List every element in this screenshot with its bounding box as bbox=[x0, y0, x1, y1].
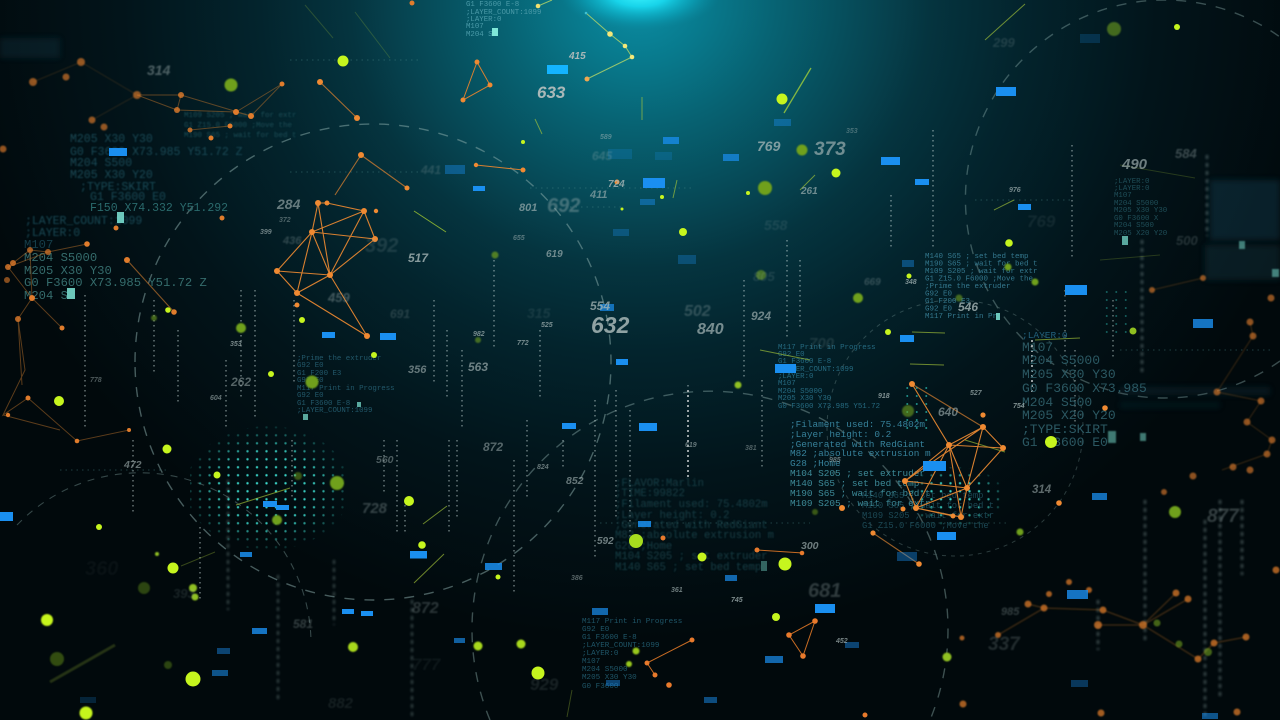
code: center left small bbox=[297, 355, 395, 415]
bottom right nodes bbox=[960, 566, 1280, 716]
code: upper right bbox=[1114, 178, 1167, 238]
code: upper left crisp line: F150 X74.332 Y51.292 bbox=[90, 202, 228, 215]
code: top left small: M190 S65 ; wait for bed t bbox=[184, 132, 297, 140]
bright numbers: 284 bbox=[276, 196, 301, 212]
code: lower center dim bbox=[615, 478, 774, 574]
bright numbers: 517 bbox=[408, 251, 429, 265]
code: center right small: G0 F3600 X73.985 Y51.72 bbox=[778, 403, 880, 411]
code: bottom center: G92 E0 bbox=[582, 626, 610, 634]
code: center left small: G92 E0 bbox=[297, 377, 324, 385]
tiny numbers: 824 bbox=[537, 464, 549, 471]
dim defocused numbers: 872 bbox=[412, 600, 439, 617]
bright numbers: 262 bbox=[230, 375, 251, 389]
code: upper right: M204 S5000 bbox=[1114, 200, 1158, 208]
mesh nodes bbox=[839, 381, 1108, 567]
code: left block bbox=[24, 238, 207, 303]
bright numbers: 300 bbox=[801, 540, 819, 552]
tiny numbers: 754 bbox=[1013, 403, 1025, 410]
bright numbers: 801 bbox=[519, 202, 537, 214]
code: behind network lower right: M109 S205 ; wait for extr bbox=[862, 511, 994, 521]
code: upper right: M204 S500 bbox=[1114, 222, 1154, 230]
code: mid-right small block: M190 S65 ; wait for bed t bbox=[925, 260, 1038, 268]
code: mid-right small block: G92 E0 bbox=[925, 290, 953, 298]
code: mid-right small block: M109 S205 ; wait for extr bbox=[925, 268, 1038, 276]
code: large right block: M204 S500 bbox=[1022, 395, 1092, 410]
tiny numbers: 353 bbox=[230, 341, 242, 348]
code: large right block: M205 X20 Y20 bbox=[1022, 408, 1116, 423]
mint data markers bbox=[67, 28, 1279, 571]
code: center right small: M117 Print in Progress bbox=[778, 344, 876, 352]
code: bottom center: G0 F3600 bbox=[582, 683, 619, 691]
network: bottom center bbox=[644, 536, 868, 718]
bright numbers: 546 bbox=[958, 300, 978, 314]
code: center right small: ;LAYER_COUNT:1099 bbox=[778, 366, 853, 374]
code: large right block: G1 F3600 E0 bbox=[1022, 435, 1108, 450]
tiny numbers: 361 bbox=[671, 587, 683, 594]
bright numbers: 633 bbox=[537, 83, 566, 102]
dim defocused numbers: 502 bbox=[684, 303, 711, 320]
bright numbers: 769 bbox=[757, 138, 781, 154]
code: top center bbox=[466, 1, 541, 39]
code: center right small bbox=[778, 344, 880, 411]
bright numbers: 490 bbox=[1121, 156, 1148, 173]
network lines top-left bbox=[33, 62, 282, 130]
tiny numbers: 525 bbox=[541, 322, 553, 329]
bright numbers: 724 bbox=[608, 179, 625, 190]
code: center right small: G92 E0 bbox=[778, 351, 805, 359]
code: upper right: G0 F3600 X bbox=[1114, 215, 1159, 223]
code: upper right: M205 X30 Y30 bbox=[1114, 207, 1167, 215]
tiny numbers: 772 bbox=[517, 340, 529, 347]
code: left block: M204 S bbox=[24, 289, 68, 303]
code: lower center dim: ;Filament used: 75.4802m bbox=[615, 499, 768, 511]
tiny numbers: 619 bbox=[685, 442, 697, 449]
code: upper right: ;LAYER:0 bbox=[1114, 185, 1149, 193]
bright numbers: 472 bbox=[123, 459, 142, 471]
code: left block: M107 bbox=[24, 238, 53, 252]
mesh lines bbox=[127, 82, 407, 336]
code: center right main: M109 S205 ; wait for extr bbox=[790, 498, 931, 509]
bright numbers: 560 bbox=[376, 454, 394, 466]
code: center right small: M204 S5000 bbox=[778, 388, 822, 396]
code: center right small: M107 bbox=[778, 380, 796, 388]
code: center right small: G1 F3600 E-8 bbox=[778, 358, 831, 366]
dim defocused numbers: 392 bbox=[365, 235, 398, 257]
dim defocused numbers: 315 bbox=[527, 305, 551, 321]
blurred data panel far right bbox=[0, 38, 1280, 408]
code: center left small: G1 F200 E3 bbox=[297, 370, 341, 378]
dim defocused numbers: 777 bbox=[412, 655, 442, 674]
dim defocused numbers: 441 bbox=[420, 163, 441, 177]
dim defocused numbers: 882 bbox=[328, 695, 354, 712]
tiny numbers: 348 bbox=[905, 279, 917, 286]
code: upper right: M205 X20 Y20 bbox=[1114, 230, 1167, 238]
dim defocused numbers: 500 bbox=[1176, 233, 1198, 248]
bright numbers: 640 bbox=[938, 405, 958, 419]
network: right center mesh bbox=[839, 381, 1108, 567]
code: large right block: M204 S5000 bbox=[1022, 353, 1100, 368]
code: center right main: G28 ;Home bbox=[790, 458, 841, 469]
code: left block: M205 X30 Y30 bbox=[24, 264, 112, 278]
dim defocused numbers: 360 bbox=[85, 558, 118, 580]
bright numbers: 840 bbox=[697, 321, 724, 338]
code: lower center dim: M140 S65 ; set bed temp bbox=[615, 562, 761, 574]
dim defocused numbers: 681 bbox=[808, 580, 841, 602]
code: top left small: G1 Z15.0 F6000 ;Move the bbox=[184, 122, 292, 130]
code: upper left defocused bbox=[25, 133, 243, 240]
code: upper left defocused: G1 F3600 E0 bbox=[90, 191, 166, 204]
dim defocused numbers: 728 bbox=[362, 500, 388, 517]
code: bottom center: ;LAYER:0 bbox=[582, 650, 619, 658]
code: center right main: M140 S65 ; set bed temp bbox=[790, 478, 919, 489]
code: mid-right small block: ;Prime the extruder bbox=[925, 283, 1011, 291]
code: center right main: ;Filament used: 75.4802m bbox=[790, 419, 925, 430]
defocused vertical streams bbox=[228, 155, 1242, 720]
code: mid-right small block: M117 Print in Pr bbox=[925, 313, 997, 321]
tiny numbers: 527 bbox=[970, 390, 983, 397]
code: large right block: ;TYPE:SKIRT bbox=[1022, 422, 1108, 437]
dim defocused numbers: 985 bbox=[1001, 606, 1020, 618]
bright numbers: 261 bbox=[800, 186, 818, 197]
tiny numbers: 381 bbox=[745, 445, 757, 452]
code: bottom center: M107 bbox=[582, 658, 600, 666]
network: right side defocused bbox=[1149, 275, 1276, 495]
code: large right block: G0 F3600 X73.985 bbox=[1022, 381, 1147, 396]
tiny numbers: 372 bbox=[279, 217, 291, 224]
bright numbers: 592 bbox=[597, 536, 614, 547]
right network lines bbox=[1152, 278, 1272, 470]
code: top center: M204 S bbox=[466, 31, 493, 39]
network: bottom right defocused bbox=[960, 566, 1280, 716]
code: upper left defocused: M205 X30 Y30 bbox=[70, 133, 153, 146]
dim defocused numbers: 393 bbox=[173, 586, 195, 601]
code: lower center dim: M82 ;absolute extrusion m bbox=[615, 530, 774, 542]
bright numbers: 356 bbox=[408, 364, 427, 376]
code: top left small: M109 S205 ; wait for extr bbox=[184, 112, 297, 120]
tiny numbers: 745 bbox=[731, 597, 743, 604]
network: top-left defocused bbox=[0, 0, 414, 230]
network: main left mesh bbox=[127, 79, 410, 339]
code: upper left defocused: ;LAYER_COUNT:1099 bbox=[25, 215, 142, 228]
code: center right small: ;LAYER:0 bbox=[778, 373, 813, 381]
code: top center: ;LAYER_COUNT:1099 bbox=[466, 9, 541, 17]
tiny numbers: 976 bbox=[1009, 187, 1021, 194]
code: lower center dim: M104 S205 ; set extruder bbox=[615, 551, 768, 563]
code: left block: G0 F3600 X73.985 Y51.72 Z bbox=[24, 276, 207, 290]
dim defocused numbers: 769 bbox=[1027, 212, 1056, 231]
tiny numbers: 918 bbox=[878, 393, 890, 400]
dim defocused numbers: 459 bbox=[327, 290, 350, 305]
code: large right block bbox=[1022, 330, 1147, 450]
tiny numbers: 604 bbox=[210, 395, 222, 402]
code: center left small: M117 Print in Progress bbox=[297, 385, 395, 393]
tiny numbers: 589 bbox=[600, 134, 612, 141]
code: upper right: M107 bbox=[1114, 192, 1132, 200]
code: mid-right small block: G92 E0 bbox=[925, 306, 953, 314]
code: mid-right small block: G1 Z15.0 F6000 ;Move the bbox=[925, 276, 1033, 284]
bright numbers: 563 bbox=[468, 360, 488, 374]
dotted vertical data streams bbox=[85, 130, 1113, 600]
dim defocused numbers: 692 bbox=[547, 195, 580, 217]
dim defocused numbers: 314 bbox=[147, 62, 171, 78]
bottom right lines bbox=[998, 593, 1246, 659]
code: upper left defocused: M204 S500 bbox=[70, 157, 132, 170]
code: large right block: M205 X30 Y30 bbox=[1022, 367, 1116, 382]
code: left block: M204 S5000 bbox=[24, 251, 97, 265]
code: behind network lower right bbox=[862, 491, 994, 531]
dim defocused numbers: 691 bbox=[390, 307, 410, 321]
tiny numbers: 353 bbox=[846, 128, 858, 135]
code: center right main: M190 S65 ; wait for bed t bbox=[790, 488, 931, 499]
code: center left small: G92 E0 bbox=[297, 392, 324, 400]
code: behind network lower right: G1 Z15.0 F6000 ;Move the bbox=[862, 521, 989, 531]
dim defocused numbers: 805 bbox=[753, 269, 775, 284]
dim defocused numbers: 581 bbox=[293, 617, 313, 631]
top cyan light glow bbox=[560, 0, 720, 32]
code: bottom center: M204 S5000 bbox=[582, 666, 628, 674]
code: top center: M107 bbox=[466, 23, 484, 31]
code: center left small: ;Prime the extruder bbox=[297, 355, 381, 363]
code: top left small bbox=[184, 112, 297, 140]
dim defocused numbers: 700 bbox=[809, 335, 835, 352]
bright numbers: 619 bbox=[546, 249, 563, 260]
bright numbers: 554 bbox=[590, 299, 610, 313]
dim defocused numbers: 645 bbox=[592, 149, 612, 163]
code: upper left defocused: M205 X30 Y20 bbox=[70, 169, 153, 182]
bright numbers: 411 bbox=[589, 189, 608, 201]
code: center left small: ;LAYER_COUNT:1099 bbox=[297, 407, 372, 415]
dim defocused numbers: 436 bbox=[282, 235, 302, 247]
tiny numbers: 985 bbox=[829, 457, 841, 464]
dim defocused numbers: 929 bbox=[530, 675, 559, 694]
tiny numbers: 778 bbox=[90, 377, 102, 384]
tiny numbers: 655 bbox=[513, 235, 525, 242]
code: lower center dim: G28 ;Home bbox=[615, 541, 672, 553]
code: mid-right small block: M140 S65 ; set bed temp bbox=[925, 253, 1029, 261]
dim defocused numbers: 669 bbox=[864, 277, 881, 288]
dim defocused numbers: 337 bbox=[988, 634, 1021, 655]
network: top triangle bbox=[460, 60, 526, 172]
code: top center: G1 F3600 E-8 bbox=[466, 1, 519, 9]
bright numbers bbox=[123, 51, 1148, 552]
code: behind network lower right: M190 S65 ; wait for bed t bbox=[862, 501, 994, 511]
code: lower center dim: ;Layer height: 0.2 bbox=[615, 510, 729, 522]
code: large right block: M107 bbox=[1022, 340, 1053, 355]
left edge lines bbox=[3, 244, 129, 441]
code: large right block: ;LAYER:0 bbox=[1022, 330, 1068, 341]
code: bottom center bbox=[582, 618, 682, 691]
code: center right small: M205 X30 Y30 bbox=[778, 395, 831, 403]
code: center left small: G1 F3600 E-8 bbox=[297, 400, 350, 408]
code: upper left defocused: ;LAYER:0 bbox=[25, 227, 80, 240]
code: center right main: M104 S205 ; set extruder bbox=[790, 468, 925, 479]
network: top yellow chain bbox=[536, 0, 634, 184]
network: left edge bbox=[3, 241, 177, 443]
network nodes top-left bbox=[0, 0, 414, 230]
code: behind network lower right: M140 S65 ; set bed temp bbox=[862, 491, 983, 501]
code: center right main: M82 ;absolute extrusion m bbox=[790, 448, 931, 459]
mesh lines bbox=[873, 384, 1003, 564]
code: upper right: ;LAYER:0 bbox=[1114, 178, 1149, 186]
code: bottom center: M205 X30 Y30 bbox=[582, 674, 637, 682]
code: mid-right small block bbox=[925, 253, 1038, 321]
bright numbers: 415 bbox=[568, 51, 586, 62]
code: center right main: ;Layer height: 0.2 bbox=[790, 429, 891, 440]
bright numbers: 373 bbox=[814, 139, 846, 160]
code: top center: ;LAYER:0 bbox=[466, 16, 501, 24]
code: center right main: ;Generated with RedGiant bbox=[790, 439, 925, 450]
bright numbers: 872 bbox=[483, 440, 503, 454]
code: lower center dim: ;TIME:99822 bbox=[615, 488, 685, 500]
horizontal dotted guide lines bbox=[60, 60, 1270, 523]
code: upper left defocused: ;TYPE:SKIRT bbox=[80, 181, 156, 194]
bright numbers: 852 bbox=[566, 475, 584, 487]
dim defocused numbers: 299 bbox=[992, 35, 1015, 50]
code: mid-right small block: G1 F200 E3 bbox=[925, 298, 971, 306]
tiny numbers: 452 bbox=[835, 638, 848, 645]
dim defocused numbers: 877 bbox=[1207, 506, 1240, 527]
code: bottom center: G1 F3600 E-8 bbox=[582, 634, 637, 642]
left edge nodes bbox=[4, 241, 177, 443]
dim defocused numbers: 584 bbox=[1175, 146, 1197, 161]
tiny numbers bbox=[90, 128, 1025, 645]
bright numbers: 632 bbox=[591, 312, 630, 338]
tiny numbers: 399 bbox=[260, 229, 272, 236]
code: bottom center: M117 Print in Progress bbox=[582, 618, 682, 626]
tiny numbers: 386 bbox=[571, 575, 583, 582]
bright numbers: 924 bbox=[751, 309, 771, 323]
code: lower center dim: ;FLAVOR:Marlin bbox=[615, 478, 704, 490]
tiny numbers: 982 bbox=[473, 331, 485, 338]
code: center right main bbox=[790, 419, 931, 509]
code: upper left defocused: G0 F3600 X73.985 Y51.72 Z bbox=[70, 146, 243, 159]
dot grids bbox=[190, 285, 1132, 555]
mesh nodes bbox=[274, 79, 410, 339]
code: lower center dim: ;Generated with RedGiant bbox=[615, 520, 768, 532]
bright numbers: 314 bbox=[1032, 484, 1052, 496]
right network nodes bbox=[1149, 275, 1276, 495]
code: bottom center: ;LAYER_COUNT:1099 bbox=[582, 642, 660, 650]
dim defocused numbers: 558 bbox=[764, 217, 788, 233]
code: center left small: G92 E0 bbox=[297, 362, 324, 370]
